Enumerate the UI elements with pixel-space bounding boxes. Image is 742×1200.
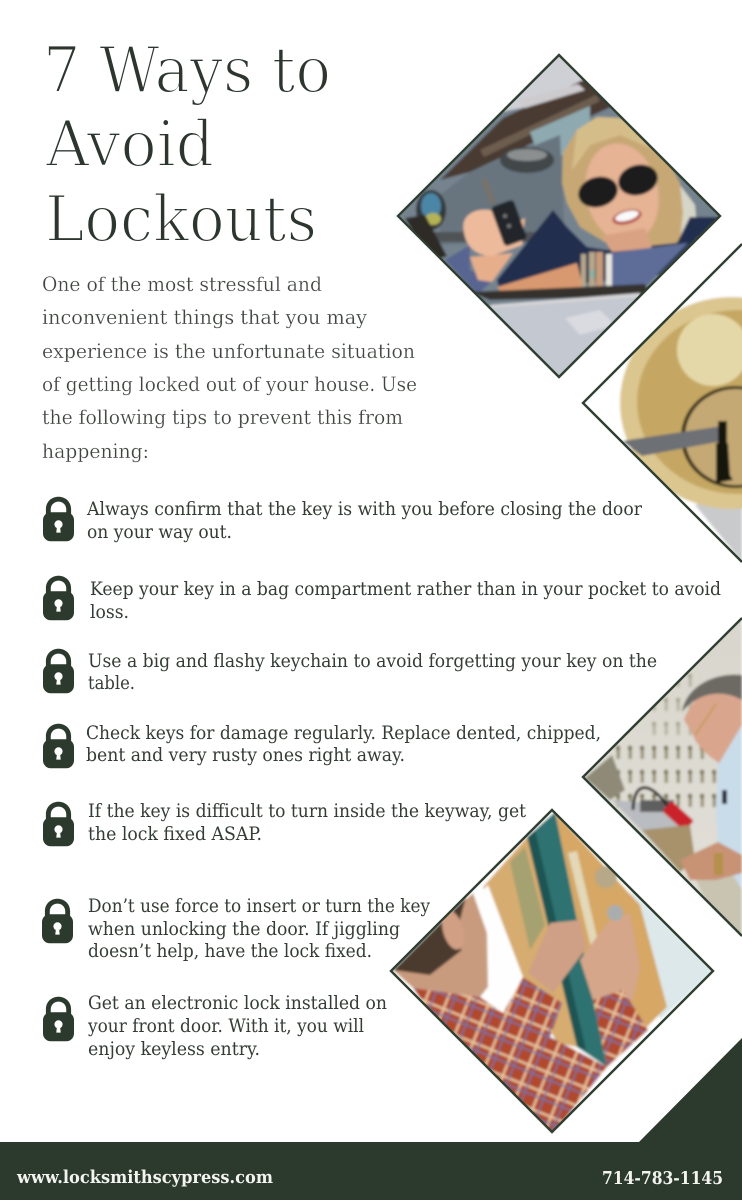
title: 7 Ways to — [43, 34, 331, 108]
tip 6: doesn’t help, have the lock fixed. — [88, 940, 372, 962]
intro paragraph: experience is the unfortunate situation — [42, 339, 415, 363]
photo: key in brass lock — [583, 244, 742, 562]
icon: padlock — [43, 497, 74, 541]
icon: padlock — [43, 649, 74, 693]
tip 3 — [43, 649, 657, 694]
tip 3: Use a big and flashy keychain to avoid forgetting your key on the — [88, 650, 657, 672]
tip 5 — [43, 800, 526, 846]
tip 4: Check keys for damage regularly. Replace dented, chipped, — [86, 722, 601, 744]
icon: padlock — [43, 997, 74, 1041]
intro paragraph: happening: — [42, 439, 149, 463]
intro paragraph: One of the most stressful and — [42, 272, 322, 296]
title — [43, 34, 331, 257]
phone number: 714-783-1145 — [602, 1168, 723, 1189]
title: Avoid — [45, 108, 214, 182]
tip 7: Get an electronic lock installed on — [88, 992, 387, 1014]
tip 2 — [43, 576, 721, 623]
intro paragraph — [42, 272, 417, 463]
photo: woman holding car key — [398, 50, 720, 380]
tip 1: Always confirm that the key is with you before closing the door — [86, 498, 643, 520]
website address: www.locksmithscypress.com — [16, 1167, 273, 1188]
icon: padlock — [42, 899, 73, 943]
tip 4: bent and very rusty ones right away. — [86, 744, 405, 766]
tip 3: table. — [88, 672, 135, 694]
title: Lockouts — [45, 183, 317, 257]
tip 1: on your way out. — [87, 521, 232, 543]
photo: locksmith cutting keys — [583, 618, 742, 936]
intro paragraph: inconvenient things that you may — [42, 305, 368, 329]
tip 7: your front door. With it, you will — [87, 1015, 364, 1037]
tip 4 — [43, 722, 601, 768]
tip 7: enjoy keyless entry. — [88, 1038, 260, 1060]
footer band — [0, 1038, 742, 1200]
tip 6: Don’t use force to insert or turn the key — [88, 895, 430, 917]
intro paragraph: the following tips to prevent this from — [42, 405, 403, 429]
photo: man installing door lock — [391, 810, 713, 1135]
icon: padlock — [43, 724, 74, 768]
icon: padlock — [43, 576, 74, 620]
tip 7 — [43, 992, 387, 1060]
tip 1 — [43, 497, 643, 543]
tip 6: when unlocking the door. If jiggling — [88, 918, 400, 940]
tip 5: the lock fixed ASAP. — [88, 823, 262, 845]
tip 2: loss. — [90, 601, 129, 623]
tip 5: If the key is difficult to turn inside the keyway, get — [88, 800, 526, 822]
icon: padlock — [43, 802, 74, 846]
intro paragraph: of getting locked out of your house. Use — [42, 372, 417, 396]
tip 6 — [42, 895, 430, 962]
